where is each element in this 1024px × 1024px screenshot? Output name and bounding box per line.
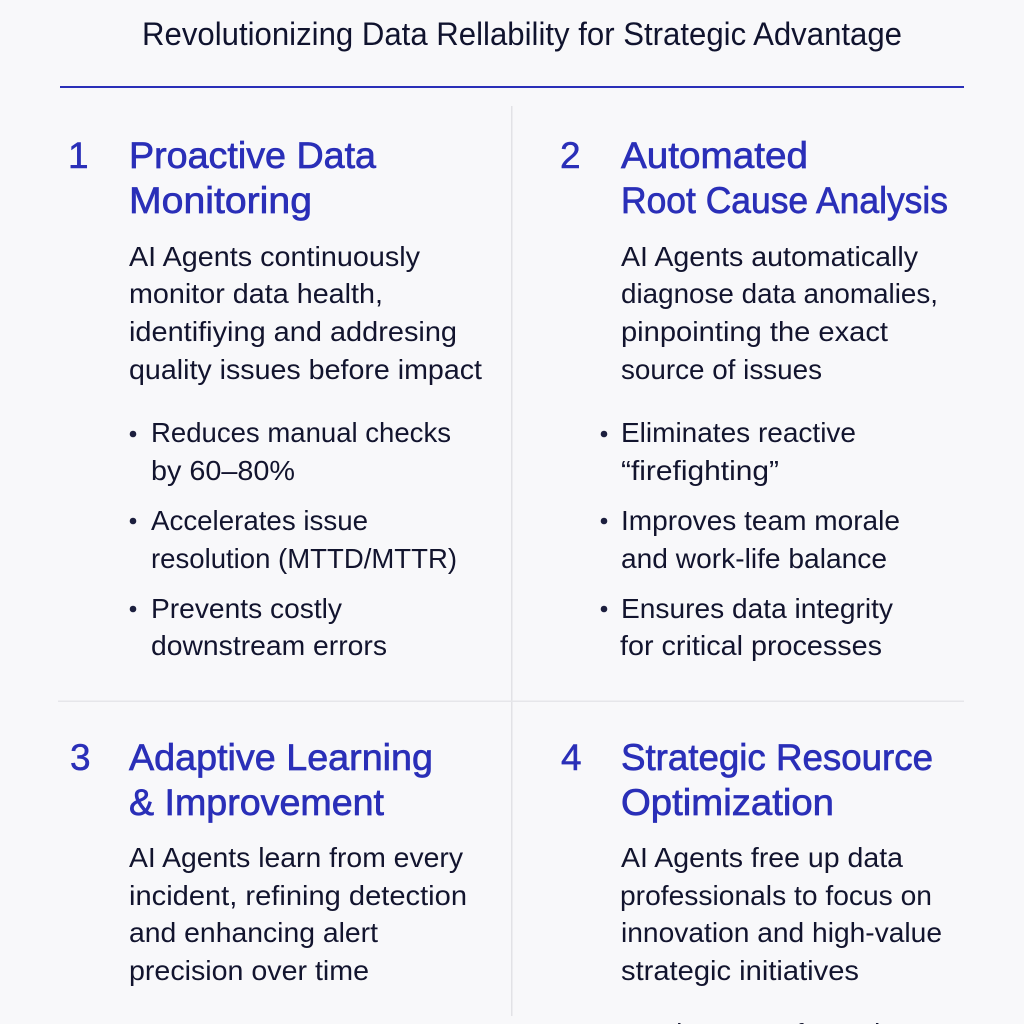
- heading: automated root cause analysis: [621, 135, 948, 221]
- bullet list: Accelerates issue: [151, 505, 368, 536]
- description text: AI Agents continuously: [129, 241, 420, 272]
- number 3: 3: [70, 737, 91, 778]
- description text: incident, refining detection: [129, 880, 467, 911]
- heading: proactive data monitoring: [129, 135, 376, 221]
- number 4: 4: [561, 737, 582, 778]
- panel: adaptive learning and improvement: [70, 737, 467, 1024]
- description text: strategic initiatives: [621, 955, 859, 986]
- bullet list: Ensures data integrity: [621, 593, 893, 624]
- bullet list: [130, 417, 457, 661]
- title: Revolutionizing Data Rellability for Strategic Advantage: [142, 16, 902, 52]
- description text: AI Agents automatically: [621, 241, 918, 272]
- bullet list: Reduces manual checks: [151, 417, 451, 448]
- description text: AI Agents free up data: [621, 842, 904, 873]
- description text: quality issues before impact: [129, 354, 482, 385]
- heading: proactive data monitoring: Proactive Data: [129, 135, 376, 176]
- bullet list: “firefighting”: [621, 455, 779, 486]
- number 1: 1: [68, 135, 89, 176]
- heading: strategic resource optimization: Strategic Resource: [621, 737, 933, 778]
- bullet list: Prevents costly: [151, 593, 342, 624]
- bullet list: resolution (MTTD/MTTR): [151, 543, 457, 574]
- number 2: 2: [560, 135, 581, 176]
- description text: diagnose data anomalies,: [621, 278, 938, 309]
- description text: [621, 241, 938, 385]
- description text: professionals to focus on: [620, 880, 932, 911]
- description text: innovation and high-value: [621, 917, 942, 948]
- description text: [129, 842, 467, 986]
- heading: adaptive learning and improvement: [129, 737, 433, 823]
- bullet list: for critical processes: [620, 630, 882, 661]
- description text: pinpointing the exact: [621, 316, 888, 347]
- heading: proactive data monitoring: Monitoring: [129, 180, 312, 221]
- panel: automated root cause analysis: [560, 135, 948, 661]
- bullet list: downstream errors: [151, 630, 387, 661]
- description text: and enhancing alert: [129, 917, 378, 948]
- bullet list: Eliminates reactive: [621, 417, 856, 448]
- panel: proactive data monitoring: [68, 135, 482, 661]
- heading: strategic resource optimization: Optimization: [621, 782, 834, 823]
- description text: monitor data health,: [129, 278, 383, 309]
- heading: strategic resource optimization: [621, 737, 933, 823]
- description text: [620, 842, 942, 986]
- bullet list: and work-life balance: [621, 543, 887, 574]
- bullet list: Improves team morale: [621, 505, 900, 536]
- description text: AI Agents learn from every: [129, 842, 463, 873]
- heading: automated root cause analysis: Root Cause Analysis: [621, 180, 948, 221]
- description text: [129, 241, 482, 385]
- heading: adaptive learning and improvement: Adaptive Learning: [129, 737, 433, 778]
- heading: adaptive learning and improvement: & Improvement: [129, 782, 385, 823]
- description text: precision over time: [129, 955, 369, 986]
- description text: source of issues: [621, 354, 822, 385]
- panel: strategic resource optimization: [561, 737, 942, 1024]
- bullet list: [601, 417, 900, 661]
- heading: automated root cause analysis: Automated: [621, 135, 808, 176]
- description text: identifiying and addresing: [129, 316, 457, 347]
- bullet list: by 60–80%: [151, 455, 295, 486]
